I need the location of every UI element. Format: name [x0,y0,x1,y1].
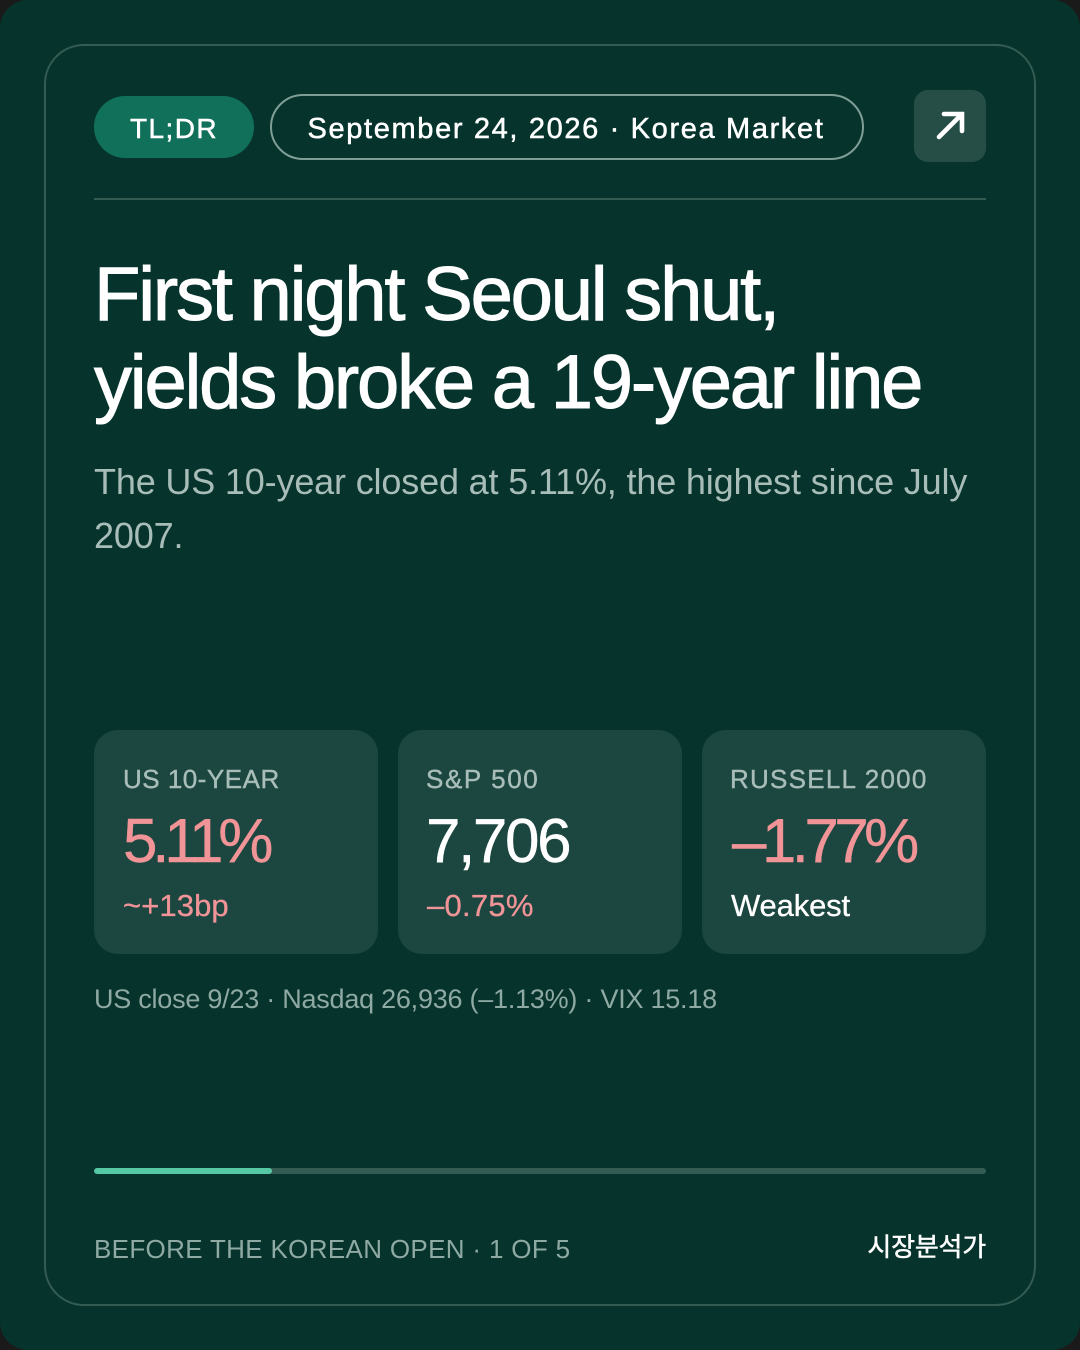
footer label: BEFORE THE KOREAN OPEN · 1 OF 5 [94,1234,570,1264]
stat card: S&P 500: S&P 500 [426,764,539,794]
market note: US close 9/23 · Nasdaq 26,936 (–1.13%) · VIX 15.18 [94,984,717,1014]
icon: arrow button [914,90,986,162]
stat card: Russell 2000: –1.77% [732,807,915,876]
date pill: September 24, 2026 · Korea Market [307,113,825,145]
subtitle [94,461,968,556]
progress bar [94,1168,986,1174]
stat card: S&P 500: –0.75% [427,888,534,923]
stat card: US 10-year: US 10-YEAR [123,764,280,794]
stat card: Russell 2000: RUSSELL 2000 [730,764,928,794]
badge: TL;DR: TL;DR [130,113,218,144]
brand name: 시장분석가 [867,1232,986,1262]
badge: TL;DR [94,96,254,158]
stat card: US 10-year: 5.11% [123,807,268,876]
subtitle: The US 10-year closed at 5.11%, the highest since July [94,461,967,502]
date pill [270,94,864,160]
stat card: S&P 500: 7,706 [426,807,569,876]
stat card: US 10-year: ~+13bp [123,888,229,923]
subtitle: 2007. [94,515,183,556]
title [94,252,921,425]
stat card: US 10-year [94,730,378,954]
stat card: Russell 2000: Weakest [731,888,850,923]
title: yields broke a 19-year line [94,340,921,425]
stat card: Russell 2000 [702,730,986,954]
title: First night Seoul shut, [94,252,778,337]
stat card: S&P 500 [398,730,682,954]
